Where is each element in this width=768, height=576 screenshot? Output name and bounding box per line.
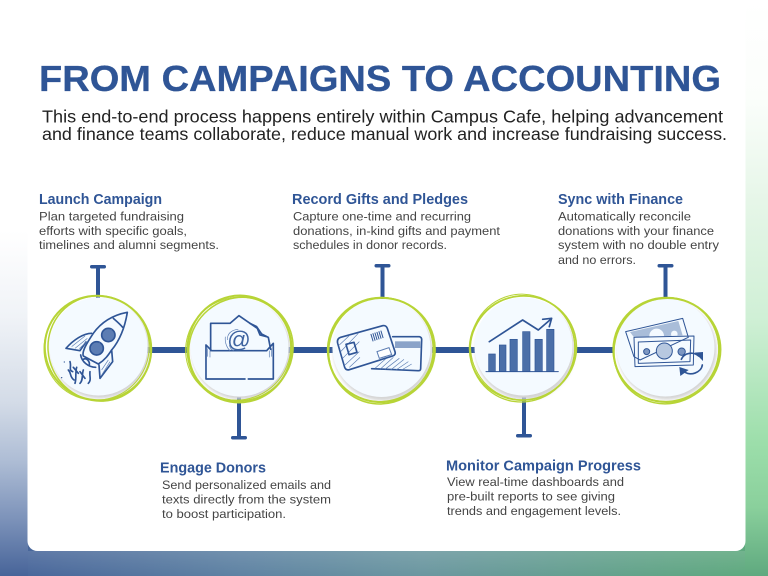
text block: Monitor Campaign Progress: pre-built reports to see giving bbox=[447, 490, 615, 504]
node: rocket bbox=[23, 274, 171, 422]
text block: Launch Campaign bbox=[39, 192, 219, 252]
text block: Record Gifts and Pledges: schedules in donor records. bbox=[293, 238, 447, 252]
subtitle: This end-to-end process happens entirely within Campus Cafe, helping advancement bbox=[42, 106, 723, 126]
text block: Launch Campaign: efforts with specific goals, bbox=[39, 224, 187, 238]
text block: Engage Donors: Engage Donors bbox=[160, 460, 266, 476]
text block: Sync with Finance: Sync with Finance bbox=[558, 192, 683, 208]
text block: Monitor Campaign Progress: Monitor Campaign Progress bbox=[446, 458, 641, 474]
node: credit cards bbox=[309, 279, 453, 423]
icon: rocket bbox=[61, 312, 127, 383]
text block: Engage Donors bbox=[160, 460, 331, 521]
text block: Engage Donors: to boost participation. bbox=[162, 507, 286, 521]
icon: banknotes and sync arrows bbox=[626, 318, 703, 376]
node: money with sync arrows bbox=[593, 277, 740, 424]
icon: rising bars and trend arrow bbox=[486, 318, 558, 372]
icon: envelope with email sign: @ bbox=[227, 327, 251, 353]
text block: Monitor Campaign Progress: View real-time dashboards and bbox=[447, 475, 624, 489]
text block: Record Gifts and Pledges: Record Gifts and Pledges bbox=[292, 192, 468, 208]
text block: Engage Donors: Send personalized emails and bbox=[162, 478, 331, 492]
title: FROM CAMPAIGNS TO ACCOUNTING bbox=[39, 58, 721, 99]
text block: Sync with Finance bbox=[558, 192, 720, 267]
text block: Launch Campaign: Launch Campaign bbox=[39, 192, 162, 208]
text block: Record Gifts and Pledges bbox=[292, 192, 501, 252]
text block: Record Gifts and Pledges: Capture one-time and recurring bbox=[293, 210, 471, 224]
text block: Monitor Campaign Progress bbox=[446, 458, 641, 518]
text block: Sync with Finance: Automatically reconcile bbox=[558, 210, 691, 224]
subtitle: and finance teams collaborate, reduce manual work and increase fundraising success. bbox=[42, 124, 727, 144]
text block: Record Gifts and Pledges: donations, in-kind gifts and payment bbox=[293, 224, 501, 238]
text block: Monitor Campaign Progress: trends and engagement levels. bbox=[447, 504, 621, 518]
text block: Sync with Finance: donations with your finance bbox=[558, 224, 714, 238]
icon: envelope with email sign bbox=[206, 316, 273, 379]
text block: Sync with Finance: and no errors. bbox=[558, 253, 636, 267]
text block: Launch Campaign: timelines and alumni segments. bbox=[39, 238, 219, 252]
icon: credit cards bbox=[337, 326, 422, 371]
connectors and stems bbox=[90, 264, 674, 440]
text block: Sync with Finance: system with no double entry bbox=[558, 238, 720, 252]
node: envelope bbox=[167, 276, 314, 422]
node: bar chart bbox=[451, 277, 594, 421]
text block: Launch Campaign: Plan targeted fundraising bbox=[39, 210, 184, 224]
text block: Engage Donors: texts directly from the system bbox=[162, 492, 331, 506]
subtitle bbox=[42, 106, 727, 144]
